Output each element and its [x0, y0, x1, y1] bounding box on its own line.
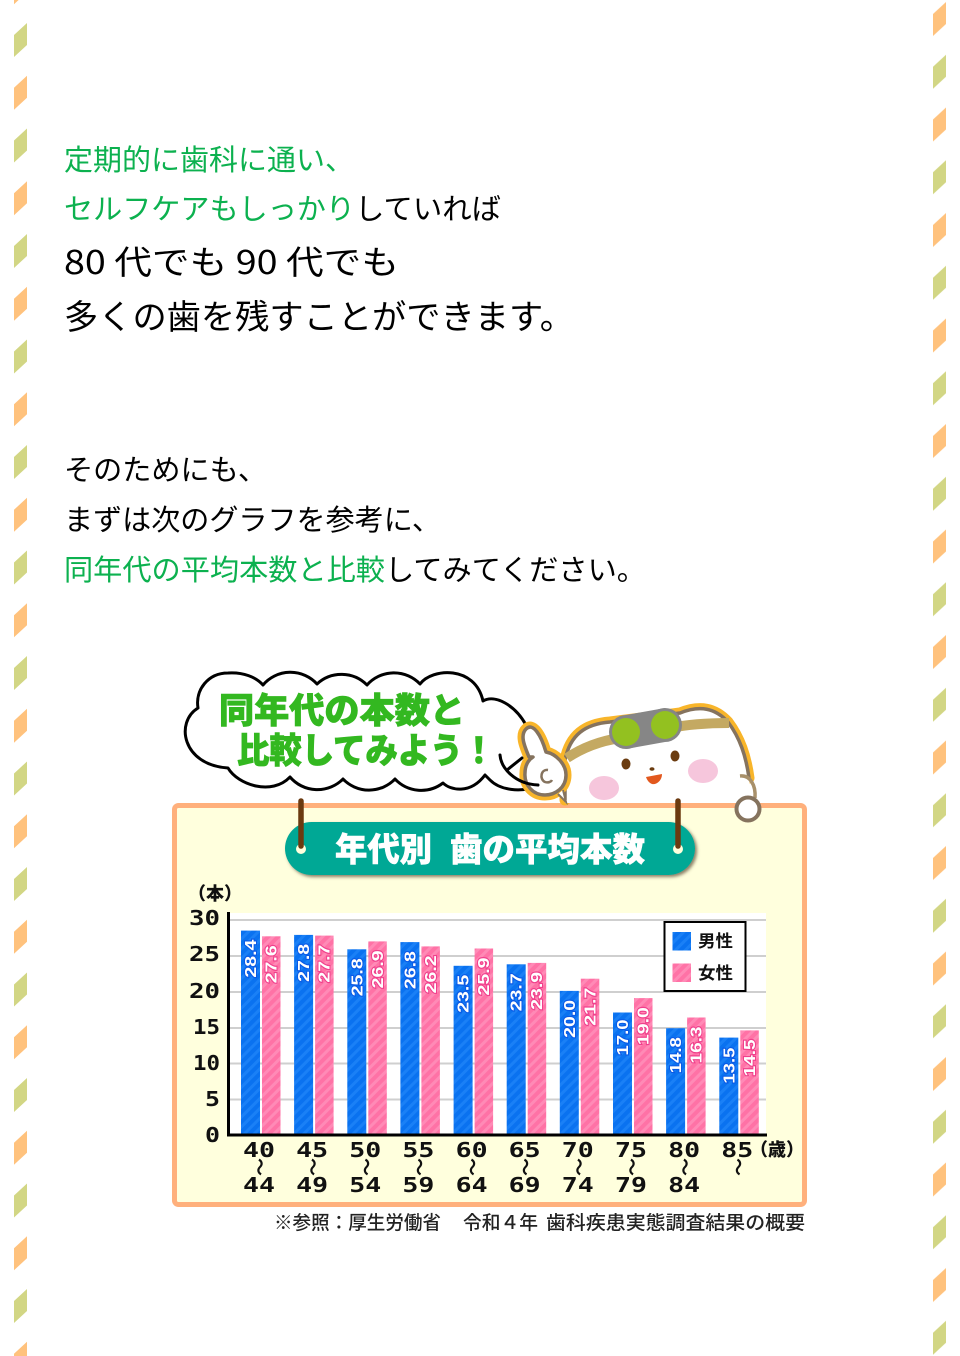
x axis labels: 74	[562, 1173, 594, 1197]
x axis labels: 44	[243, 1173, 275, 1197]
ring and hook	[736, 776, 760, 820]
bars 60-64: 25.9	[476, 957, 493, 996]
bars 55-59: 26.2	[423, 955, 440, 993]
speech bubble text	[219, 683, 495, 774]
headband	[567, 723, 729, 758]
y axis unit: （本）	[188, 880, 242, 906]
text block: compare message	[64, 447, 646, 589]
text block: compare message: してみてください。	[385, 547, 646, 589]
text block: intro message: していれば	[355, 186, 501, 228]
x axis range marks: 〜	[619, 1158, 645, 1176]
x axis range marks: 〜	[406, 1158, 432, 1176]
y axis labels: 0	[205, 1123, 220, 1147]
text block: intro message: 多くの歯を残すことができます。	[64, 290, 574, 339]
bars 45-49	[294, 935, 334, 1134]
bars 75-79: 19.0	[636, 1007, 652, 1045]
x axis labels: 59	[402, 1173, 434, 1197]
bars 40-44: 27.6	[264, 945, 280, 983]
x axis range marks: 〜	[725, 1158, 751, 1176]
text block: intro message: 定期的に歯科に通い、	[64, 137, 354, 179]
legend: 女性	[698, 959, 733, 984]
text block: compare message: まずは次のグラフを参考に、	[64, 497, 441, 539]
mascot body	[565, 709, 752, 803]
y axis labels: 25	[189, 942, 220, 966]
axes	[227, 912, 767, 1136]
x axis labels: 49	[296, 1173, 328, 1197]
text block: intro message	[64, 137, 574, 339]
x axis labels: 40	[243, 1138, 275, 1162]
bars 85+: 14.5	[742, 1039, 759, 1076]
x axis range marks: 〜	[300, 1158, 326, 1176]
bars 50-54: 26.9	[370, 950, 387, 988]
goggles	[609, 708, 682, 749]
sign title text: 歯の平均本数	[450, 823, 645, 871]
left decorative stripe	[0, 0, 60, 1356]
x axis labels: 84	[668, 1173, 700, 1197]
y axis labels	[189, 906, 220, 1147]
x axis labels	[243, 1138, 753, 1197]
x axis labels: 60	[456, 1138, 488, 1162]
x axis range marks	[247, 1158, 751, 1176]
y axis labels: 5	[205, 1087, 220, 1111]
bars 80-84: 16.3	[689, 1026, 706, 1064]
hand pointing	[523, 727, 566, 802]
hanging sign: chart title	[285, 801, 695, 875]
bars 60-64: 23.5	[456, 975, 473, 1013]
bars 40-44: 28.4	[243, 939, 260, 978]
x axis range marks: 〜	[247, 1158, 273, 1176]
sign holes	[296, 844, 683, 854]
bar chart	[188, 880, 804, 1197]
bars 80-84	[666, 1018, 706, 1134]
bars 50-54	[347, 941, 387, 1134]
sign title text	[335, 823, 645, 871]
bars 75-79: 17.0	[615, 1019, 632, 1056]
bars 55-59: 26.8	[402, 951, 419, 989]
y axis labels: 15	[193, 1015, 220, 1039]
x axis labels: 54	[349, 1173, 381, 1197]
x axis range marks: 〜	[672, 1158, 698, 1176]
y axis labels: 20	[189, 979, 220, 1003]
source note: 歯科疾患実態調査結果の概要	[546, 1208, 805, 1235]
x axis labels: 45	[296, 1138, 328, 1162]
bars 80-84: 14.8	[668, 1037, 685, 1073]
bars 70-74	[560, 979, 599, 1134]
x axis labels: 70	[562, 1138, 594, 1162]
x axis labels: 79	[615, 1173, 647, 1197]
bars 45-49: 27.8	[296, 944, 313, 982]
x axis labels: 75	[615, 1138, 647, 1162]
x axis labels: 55	[402, 1138, 434, 1162]
bars 85+	[719, 1030, 759, 1134]
text block: compare message: 同年代の平均本数と比較	[64, 547, 385, 589]
speech bubble text: 同年代の本数と	[219, 683, 465, 734]
bars 65-69: 23.9	[529, 972, 546, 1010]
bars 65-69	[507, 963, 546, 1134]
bars 60-64	[454, 948, 493, 1134]
speech bubble tail	[500, 755, 538, 785]
face	[589, 750, 718, 800]
x axis labels: 80	[668, 1138, 700, 1162]
legend: 男性	[698, 927, 733, 952]
x axis labels: 65	[509, 1138, 541, 1162]
bars 45-49: 27.7	[317, 944, 334, 983]
sign title text: 年代別	[335, 823, 432, 871]
mascot character	[500, 708, 760, 820]
text block: compare message: そのためにも、	[64, 447, 267, 489]
x axis labels: 85	[721, 1138, 753, 1162]
x axis range marks: 〜	[566, 1158, 592, 1176]
bars 40-44	[241, 931, 280, 1134]
bars 75-79	[613, 998, 652, 1134]
x axis labels: 64	[456, 1173, 488, 1197]
text block: intro message: 80 代でも 90 代でも	[64, 236, 399, 284]
bars 50-54: 25.8	[349, 958, 366, 996]
x axis unit: （歳）	[750, 1136, 804, 1162]
bars 85+: 13.5	[721, 1047, 738, 1084]
source note	[274, 1208, 805, 1235]
text block: intro message: セルフケアもしっかり	[64, 186, 355, 228]
right decorative stripe	[900, 0, 960, 1356]
x axis labels: 69	[509, 1173, 541, 1197]
bars 65-69: 23.7	[509, 973, 526, 1011]
legend	[664, 922, 746, 991]
bars 70-74: 20.0	[562, 1000, 579, 1038]
bars 55-59	[400, 942, 440, 1134]
plot background	[229, 913, 766, 1135]
bars 70-74: 21.7	[582, 988, 599, 1026]
x axis labels: 50	[349, 1138, 381, 1162]
y axis labels: 10	[193, 1051, 220, 1075]
x axis range marks: 〜	[460, 1158, 486, 1176]
panel: chart background	[174, 806, 804, 1204]
x axis range marks: 〜	[353, 1158, 379, 1176]
source note: 令和４年	[463, 1208, 538, 1235]
y axis labels: 30	[189, 906, 220, 930]
speech bubble	[185, 672, 538, 790]
sign strings	[301, 801, 678, 846]
x axis range marks: 〜	[513, 1158, 539, 1176]
source note: ※参照：厚生労働省	[274, 1208, 441, 1235]
speech bubble text: 比較してみよう！	[237, 723, 495, 774]
